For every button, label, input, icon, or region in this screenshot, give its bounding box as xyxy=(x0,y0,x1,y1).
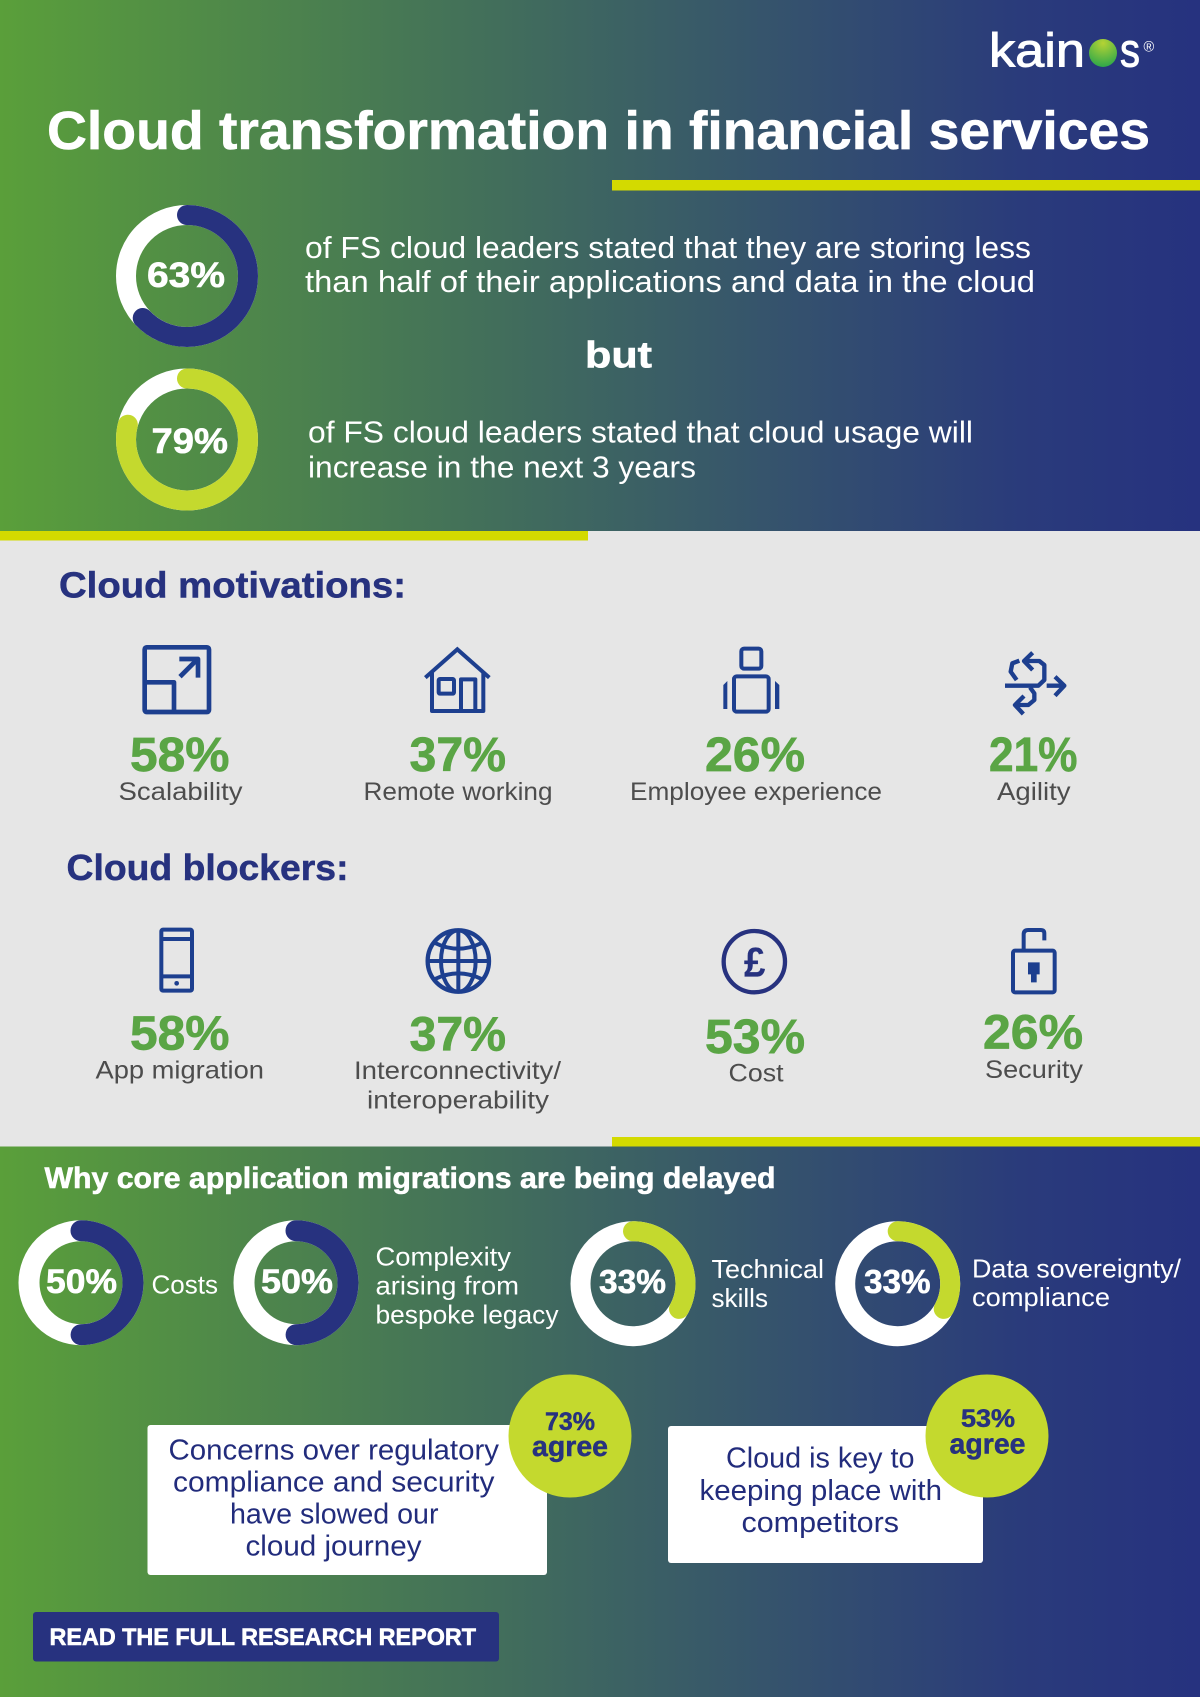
item: interconnectivity: 37% xyxy=(410,1008,506,1062)
label: technical skills: Technical xyxy=(712,1254,824,1284)
donut: technical skills 33%: 33% xyxy=(599,1263,666,1300)
label: data sovereignty: Data sovereignty/ xyxy=(972,1254,1182,1284)
label: complexity: arising from xyxy=(376,1270,519,1300)
item: agility xyxy=(989,653,1078,806)
logo: kainos: ® xyxy=(1144,40,1154,56)
donut: complexity 50%: 50% xyxy=(261,1263,333,1301)
donut: 79%: 79% xyxy=(152,422,228,461)
item: agility: 21% xyxy=(989,729,1078,782)
callout: regulatory concerns: Concerns over regulatory xyxy=(168,1434,500,1466)
accent bar xyxy=(0,531,588,540)
panel: delayed migrations xyxy=(0,1137,1200,1697)
button: read the report xyxy=(33,1612,499,1662)
label: data sovereignty xyxy=(972,1254,1182,1312)
item: cost xyxy=(705,931,805,1088)
panel: header xyxy=(0,0,1200,532)
label: complexity: bespoke legacy xyxy=(376,1300,558,1330)
text: usage will increase: of FS cloud leaders stated that cloud usage will xyxy=(308,416,973,450)
button: read the report: READ THE FULL RESEARCH REPORT xyxy=(50,1624,476,1651)
item: cost: 53% xyxy=(705,1011,805,1064)
text: storing less: than half of their applications and data in the cloud xyxy=(305,265,1035,299)
item: security xyxy=(983,930,1084,1084)
callout: regulatory concerns xyxy=(148,1374,632,1575)
callout: keeping pace: Cloud is key to xyxy=(726,1442,914,1474)
item: security: Security xyxy=(985,1056,1084,1084)
callout: regulatory concerns: cloud journey xyxy=(246,1530,422,1562)
text: storing less xyxy=(305,231,1035,299)
accent bar xyxy=(612,1137,1200,1146)
title: Cloud transformation in financial services xyxy=(47,101,1150,161)
callout: keeping pace xyxy=(668,1374,1048,1563)
item: cost: Cost xyxy=(728,1060,784,1088)
donut: data sovereignty 33% xyxy=(845,1231,950,1336)
callout: keeping pace: competitors xyxy=(742,1507,899,1539)
donut: complexity 50% xyxy=(244,1231,348,1335)
item: security: 26% xyxy=(983,1006,1083,1060)
item: employee experience: Employee experience xyxy=(630,778,882,806)
heading: cloud motivations: Cloud motivations: xyxy=(59,564,406,606)
item: remote working: 37% xyxy=(410,729,506,782)
callout: regulatory concerns: have slowed our xyxy=(230,1498,439,1530)
item: remote working: Remote working xyxy=(364,778,552,806)
label: technical skills: skills xyxy=(712,1283,768,1313)
item: interconnectivity: Interconnectivity/ xyxy=(354,1057,561,1085)
text: storing less: of FS cloud leaders stated that they are storing less xyxy=(305,231,1031,265)
item: interconnectivity: interoperability xyxy=(367,1086,550,1114)
donut: 63% xyxy=(126,215,248,337)
donut: costs 50% xyxy=(29,1231,133,1335)
badge: 73% agree xyxy=(508,1374,632,1498)
icon: globe xyxy=(428,930,489,992)
item: employee experience xyxy=(630,649,882,806)
icon: phone xyxy=(161,930,192,991)
item: scalability xyxy=(118,647,243,806)
item: app migration xyxy=(96,930,264,1084)
icon: open padlock xyxy=(1013,930,1055,992)
label: costs: Costs xyxy=(152,1270,218,1300)
badge: 53% agree xyxy=(926,1374,1048,1498)
text: but: but xyxy=(585,334,652,376)
icon: person xyxy=(723,649,779,712)
text: usage will increase xyxy=(308,416,973,484)
item: scalability: 58% xyxy=(130,729,230,782)
donut: technical skills 33% xyxy=(580,1231,686,1336)
item: remote working xyxy=(364,649,552,806)
badge: 73% agree: agree xyxy=(532,1431,608,1463)
logo: kainos: s xyxy=(1120,24,1140,76)
icon: pound coin: £ xyxy=(744,939,765,986)
logo: kainos: kain xyxy=(989,24,1085,76)
icon: scalability xyxy=(145,647,209,712)
badge: 53% agree: 53% xyxy=(961,1405,1015,1433)
callout: keeping pace: keeping place with xyxy=(700,1475,942,1507)
icon: pound coin xyxy=(724,931,785,992)
label: data sovereignty: compliance xyxy=(972,1282,1110,1312)
item: employee experience: 26% xyxy=(705,729,805,782)
heading: why delayed: Why core application migrations are being delayed xyxy=(44,1162,776,1195)
badge: 53% agree: agree xyxy=(950,1428,1026,1460)
item: scalability: Scalability xyxy=(118,778,243,806)
label: complexity xyxy=(376,1242,558,1330)
callout: regulatory concerns: compliance and security xyxy=(173,1466,495,1498)
badge: 73% agree: 73% xyxy=(545,1408,595,1436)
icon: agility arrows xyxy=(1005,653,1064,714)
label: complexity: Complexity xyxy=(376,1242,511,1272)
item: agility: Agility xyxy=(997,778,1071,806)
panel: motivations and blockers xyxy=(0,531,1200,1147)
donut: 63%: 63% xyxy=(147,256,225,295)
accent bar xyxy=(612,180,1200,190)
item: app migration: 58% xyxy=(130,1008,230,1060)
donut: costs 50%: 50% xyxy=(46,1263,117,1301)
item: interconnectivity xyxy=(354,930,561,1114)
text: usage will increase: increase in the next 3 years xyxy=(308,450,696,484)
item: app migration: App migration xyxy=(96,1056,264,1084)
icon: house xyxy=(425,649,489,711)
donut: 79% xyxy=(126,378,248,500)
logo: kainos xyxy=(989,24,1154,76)
label: technical skills xyxy=(712,1254,824,1313)
donut: data sovereignty 33%: 33% xyxy=(864,1263,930,1300)
heading: cloud blockers: Cloud blockers: xyxy=(66,847,348,888)
